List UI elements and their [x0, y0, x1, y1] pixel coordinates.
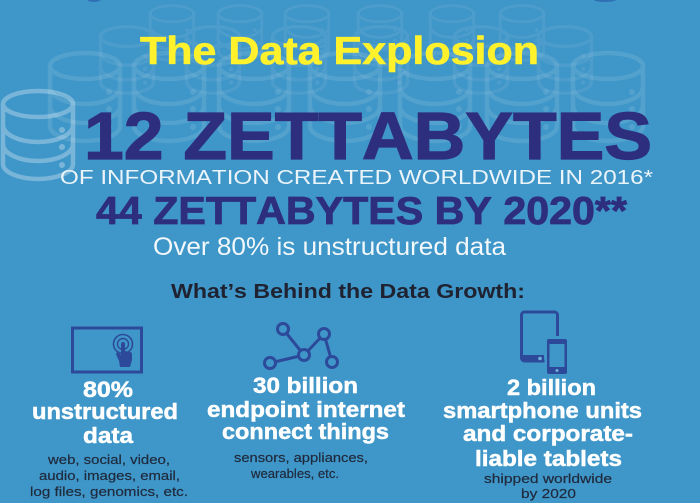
- column: unstructured data: [30, 328, 188, 499]
- description: [484, 471, 612, 501]
- stat: 80% unstructured data: 80%: [83, 377, 133, 402]
- subhead: information created: OF INFORMATION CREATED WORLDWIDE IN 2016*: [60, 166, 653, 189]
- title: The Data Explosion: [140, 30, 539, 73]
- section heading: What’s Behind the Data Growth:: [171, 281, 525, 303]
- stat: 80% unstructured data: [32, 377, 178, 448]
- stat: 2 billion smartphones: [443, 375, 642, 471]
- icon: tablet and phone: [522, 312, 567, 374]
- stat: 30 billion endpoints: [207, 373, 406, 444]
- stat: 2 billion smartphones: smartphone units: [443, 398, 642, 423]
- description: shipped worldwide: [484, 471, 612, 486]
- description: audio, images, email,: [39, 468, 180, 483]
- background database icons: [101, 6, 591, 93]
- stat: 30 billion endpoints: 30 billion: [253, 373, 358, 398]
- stat: 80% unstructured data: data: [83, 423, 134, 448]
- icon: foreground database: [3, 91, 73, 179]
- stat: 80% unstructured data: unstructured: [32, 399, 178, 424]
- stat: 2 billion smartphones: liable tablets: [475, 446, 622, 471]
- description: wearables, etc.: [250, 466, 339, 481]
- second row database icons: [50, 53, 643, 141]
- stat: 30 billion endpoints: endpoint internet: [207, 397, 406, 422]
- stat: 30 billion endpoints: connect things: [222, 419, 389, 444]
- description: by 2020: [521, 486, 576, 501]
- description: log files, genomics, etc.: [30, 484, 188, 499]
- column: internet connected things: [207, 324, 406, 481]
- stat: 2 billion smartphones: and corporate-: [463, 421, 633, 446]
- description: [234, 450, 368, 481]
- icon: touch tablet: [72, 328, 142, 372]
- description: web, social, video,: [47, 452, 170, 467]
- icon: network nodes: [264, 324, 338, 368]
- stat: 2 billion smartphones: 2 billion: [507, 375, 596, 400]
- headline: 44 zettabytes: 44 ZETTABYTES BY 2020**: [96, 190, 628, 233]
- subhead: unstructured share: Over 80% is unstructured data: [153, 233, 506, 261]
- description: sensors, appliances,: [234, 450, 368, 465]
- headline: 12 zettabytes: 12 ZETTABYTES: [84, 99, 652, 174]
- column: smartphones and tablets: [443, 312, 642, 501]
- description: [30, 452, 188, 499]
